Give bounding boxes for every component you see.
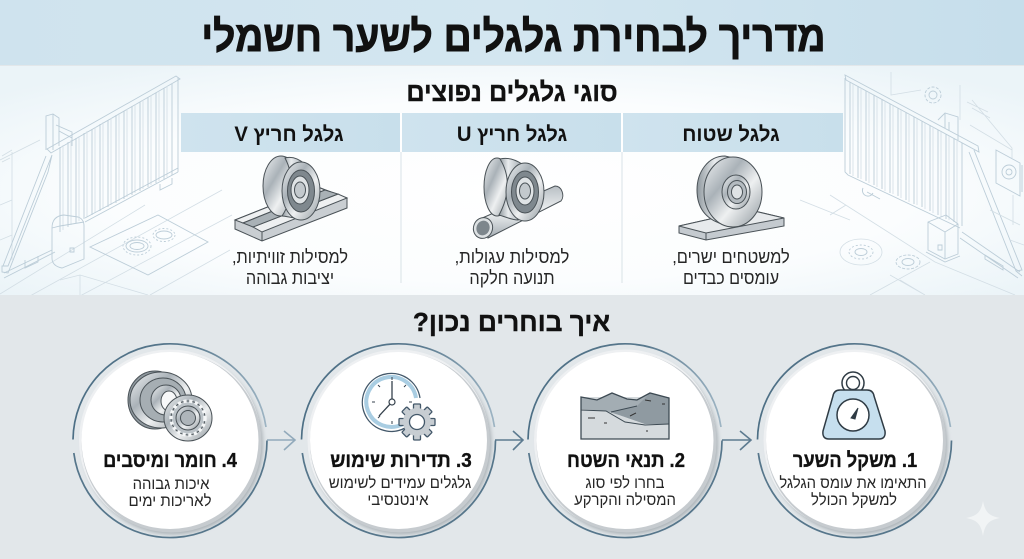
icon: terrain cross-section (581, 393, 669, 439)
column header: flat wheel (623, 113, 843, 152)
column header: flat wheel: גלגל שטוח (682, 123, 780, 146)
heading: common wheel types: סוגי גלגלים נפוצים (406, 79, 618, 107)
description: flat wheel (672, 246, 790, 288)
icon: sparkle watermark (966, 501, 1000, 536)
description: V-groove wheel (232, 246, 348, 288)
description: V-groove wheel: למסילות זוויתיות, (232, 246, 348, 267)
step description (128, 476, 212, 510)
step title: 2. תנאי השטח (567, 449, 685, 472)
description: flat wheel: עומסים כבדים (683, 267, 779, 288)
arrow: 3 to 2 (495, 431, 523, 450)
step 2: terrain conditions (528, 344, 722, 538)
panel: V-groove wheel (181, 113, 400, 288)
panel: U-groove wheel (402, 113, 621, 288)
step 1: gate weight (758, 344, 952, 538)
step title: 1. משקל השער (793, 449, 917, 472)
step description: למשקל הכולל (811, 492, 897, 509)
step description: המסילה והקרקע (574, 492, 676, 509)
step description: גלגלים עמידים לשימוש (329, 475, 472, 492)
step 3: frequency of use (302, 344, 496, 538)
title banner (0, 0, 1024, 65)
column header: U-groove wheel (402, 113, 621, 152)
description: U-groove wheel (455, 246, 569, 288)
arrow: 2 to 1 (722, 431, 751, 450)
step title: 4. חומר ומיסבים (103, 449, 237, 472)
heading: how to choose correctly: איך בוחרים נכון? (413, 307, 610, 337)
column header: U-groove wheel: גלגל חריץ U (457, 123, 567, 146)
icon: V-groove wheel on angled rail (235, 156, 347, 241)
icon: wheel and ball bearing (128, 371, 212, 441)
step description: לאריכות ימים (128, 493, 212, 510)
title banner: מדריך לבחירת גלגלים לשער חשמלי (201, 12, 826, 60)
icon: U-groove wheel on pipe rail (470, 158, 563, 241)
description: V-groove wheel: יציבות גבוהה (246, 267, 334, 288)
column header: V-groove wheel: גלגל חריץ V (234, 123, 344, 146)
description: U-groove wheel: תנועה חלקה (469, 267, 555, 288)
description: U-groove wheel: למסילות עגולות, (455, 246, 569, 267)
step description (779, 475, 927, 509)
step description: איכות גבוהה (133, 476, 210, 493)
column header: V-groove wheel (181, 113, 400, 152)
icon: flat wheel on plate (679, 156, 784, 240)
description: flat wheel: למשטחים ישרים, (672, 246, 790, 267)
arrow: 4 to 3 (267, 431, 295, 450)
section band edge (0, 295, 1024, 559)
step description (329, 475, 472, 509)
step description: התאימו את עומס הגלגל (779, 475, 927, 492)
icon: weight with dial (823, 372, 885, 439)
illustration: right gate line drawing (800, 72, 1024, 295)
illustration: left gate line drawing (0, 76, 232, 296)
step 4: material and bearings (73, 344, 267, 538)
step description (574, 475, 676, 509)
panel: flat wheel (623, 113, 843, 288)
panel: wheel types background (0, 66, 1024, 295)
step title: 3. תדירות שימוש (330, 449, 472, 472)
step description: בחרו לפי סוג (585, 475, 665, 492)
icon: clock and gear (362, 373, 435, 440)
step description: אינטנסיבי (367, 492, 429, 509)
